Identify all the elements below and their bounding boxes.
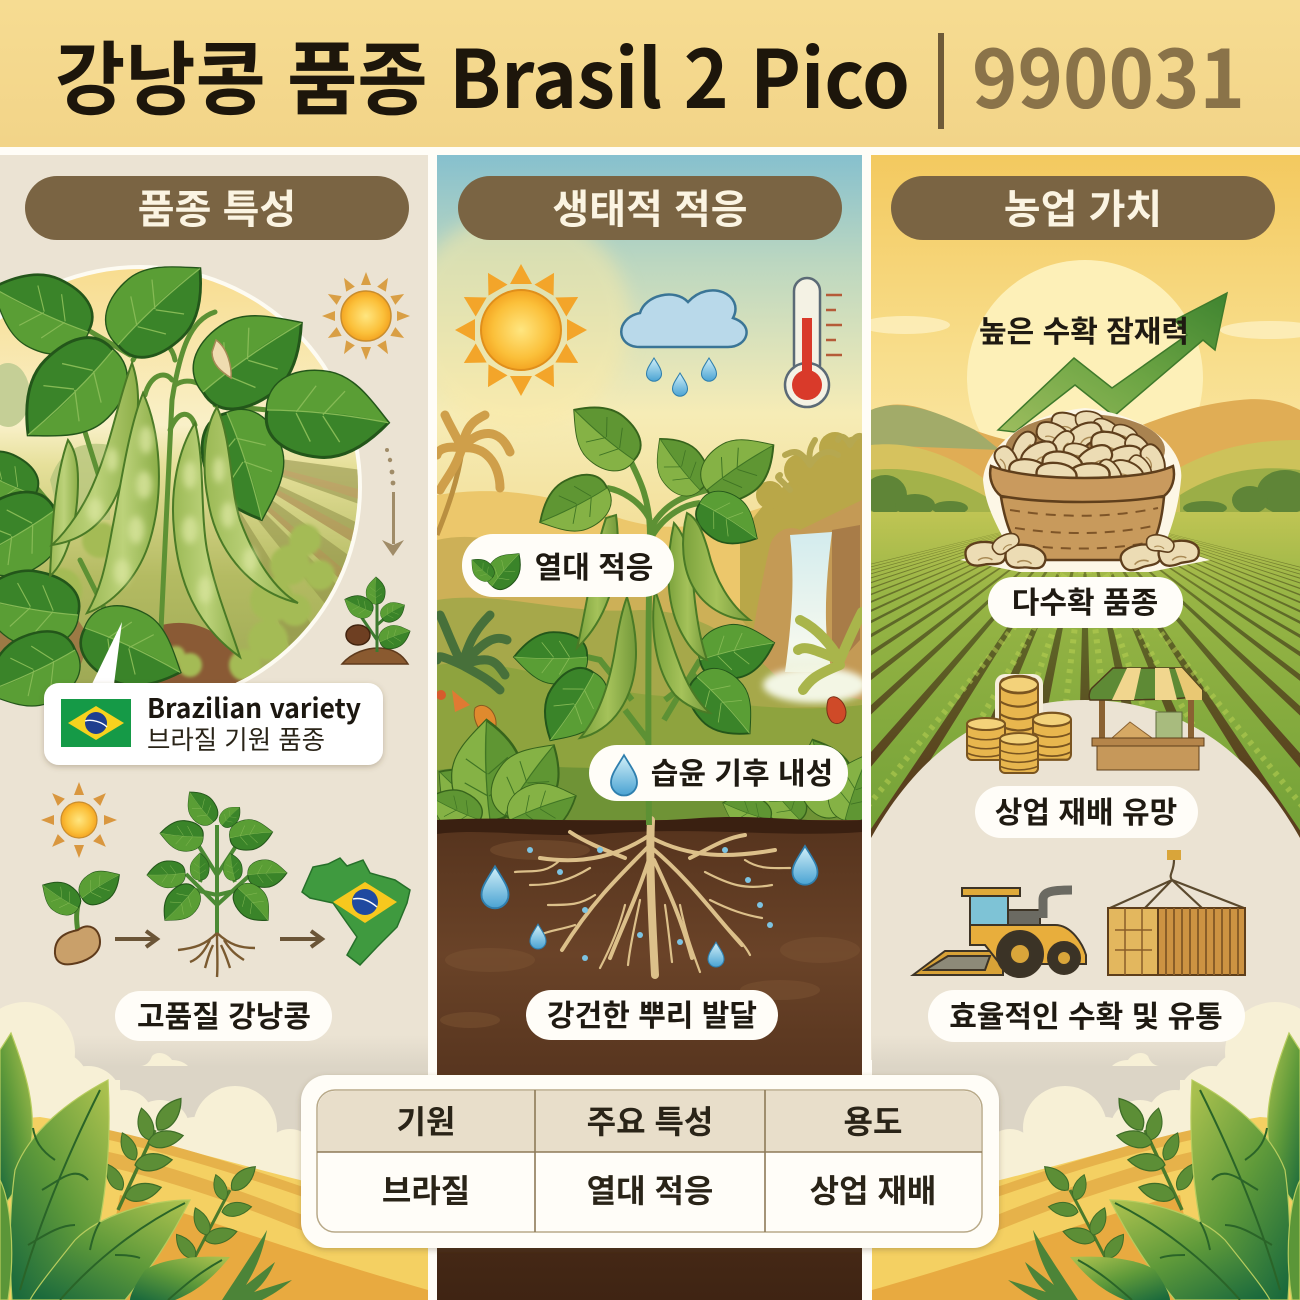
summary table (301, 1075, 999, 1248)
scene: bottom-left field and foliage (0, 1002, 428, 1300)
heading: 품종 특성: 품종 특성 (138, 177, 296, 235)
title text: 강낭콩 품종 Brasil 2 Pico (55, 16, 910, 132)
arrow: dotted downward (382, 448, 404, 556)
icon: seedling (340, 577, 414, 664)
arrow: seedling to plant (115, 931, 157, 947)
water drops (482, 866, 508, 908)
icon: basket of beans (960, 408, 1210, 572)
icon: sun (322, 272, 410, 360)
pill: 효율적인 수확 및 유통: 효율적인 수확 및 유통 (949, 992, 1223, 1036)
icon: sprouting bean (42, 870, 120, 966)
pods (50, 363, 298, 657)
callout: Brazilian variety: Brazilian variety (147, 687, 361, 726)
illustration: bean plant circle (0, 239, 393, 725)
scene: tropical background (410, 210, 891, 842)
illustration: central bean plant (514, 390, 789, 825)
label: 높은 수확 잠재력: 높은 수확 잠재력 (979, 307, 1189, 351)
cream arch (871, 700, 1300, 1060)
palm tree (437, 415, 510, 535)
icon: rain cloud (621, 290, 747, 396)
scene: farm field (0, 260, 1300, 1060)
table values (382, 1166, 936, 1212)
pill: 상업 재배 유망 (975, 786, 1198, 838)
heading: 품종 특성 (25, 176, 409, 240)
callout: Brazilian variety (44, 622, 383, 765)
table header: 기원 (397, 1097, 455, 1143)
roots (515, 820, 790, 975)
icon: leaf (472, 553, 521, 590)
icon: Brazil flag (61, 699, 131, 747)
heading: 농업 가치 (891, 176, 1275, 240)
pill: 열대 적응: 열대 적응 (535, 543, 653, 587)
title divider (938, 33, 944, 129)
pill: 다수확 품종: 다수확 품종 (1012, 578, 1158, 622)
table header: 주요 특성 (587, 1097, 713, 1143)
table values: 열대 적응 (587, 1166, 713, 1212)
pill: 다수확 품종 (988, 577, 1183, 628)
title banner (0, 0, 1300, 147)
icon: hoisted shipping container (1108, 850, 1245, 975)
leaves (0, 239, 393, 725)
panel: 품종 특성 (0, 155, 428, 1300)
variety code: 990031 (972, 16, 1245, 132)
icon: thermometer (785, 278, 842, 407)
tropical flowers (452, 690, 470, 712)
foreground foliage (437, 718, 862, 820)
pill: 습윤 기후 내성 (589, 745, 848, 801)
table header (397, 1097, 902, 1143)
scene: bottom-right field and foliage (872, 1002, 1300, 1300)
callout: Brazilian variety: 브라질 기원 품종 (147, 720, 325, 757)
dark palm plant (437, 615, 507, 690)
icon: small sun (41, 782, 117, 858)
pill: 강건한 뿌리 발달: 강건한 뿌리 발달 (547, 991, 757, 1035)
heading: 농업 가치: 농업 가치 (1004, 177, 1162, 235)
icon: market stall (1089, 668, 1204, 770)
icon: water drop (611, 755, 637, 796)
icon: Brazil map (302, 858, 410, 965)
icon: young plant (146, 784, 288, 977)
panel: 생태적 적응 (437, 155, 862, 1300)
table values: 상업 재배 (810, 1166, 936, 1212)
icon: combine harvester (913, 888, 1086, 977)
table values: 브라질 (382, 1166, 470, 1212)
pill: 열대 적응 (462, 534, 674, 597)
table header: 용도 (844, 1097, 902, 1143)
arrow: plant to Brazil (280, 931, 322, 947)
icon: coin stacks (967, 674, 1071, 773)
small palms (778, 436, 862, 490)
soil with roots (437, 817, 862, 1300)
heading: 생태적 적응: 생태적 적응 (552, 177, 748, 235)
pill: 상업 재배 유망: 상업 재배 유망 (995, 788, 1177, 832)
pill: 습윤 기후 내성: 습윤 기후 내성 (651, 749, 833, 793)
waterfall (785, 532, 832, 672)
flower (212, 340, 231, 378)
yellow-green fronds right (798, 612, 862, 690)
heading: 생태적 적응 (458, 176, 842, 240)
icon: sun (455, 264, 587, 396)
arrow: rising yield (998, 293, 1227, 432)
pill: 고품질 강낭콩: 고품질 강낭콩 (137, 992, 311, 1036)
